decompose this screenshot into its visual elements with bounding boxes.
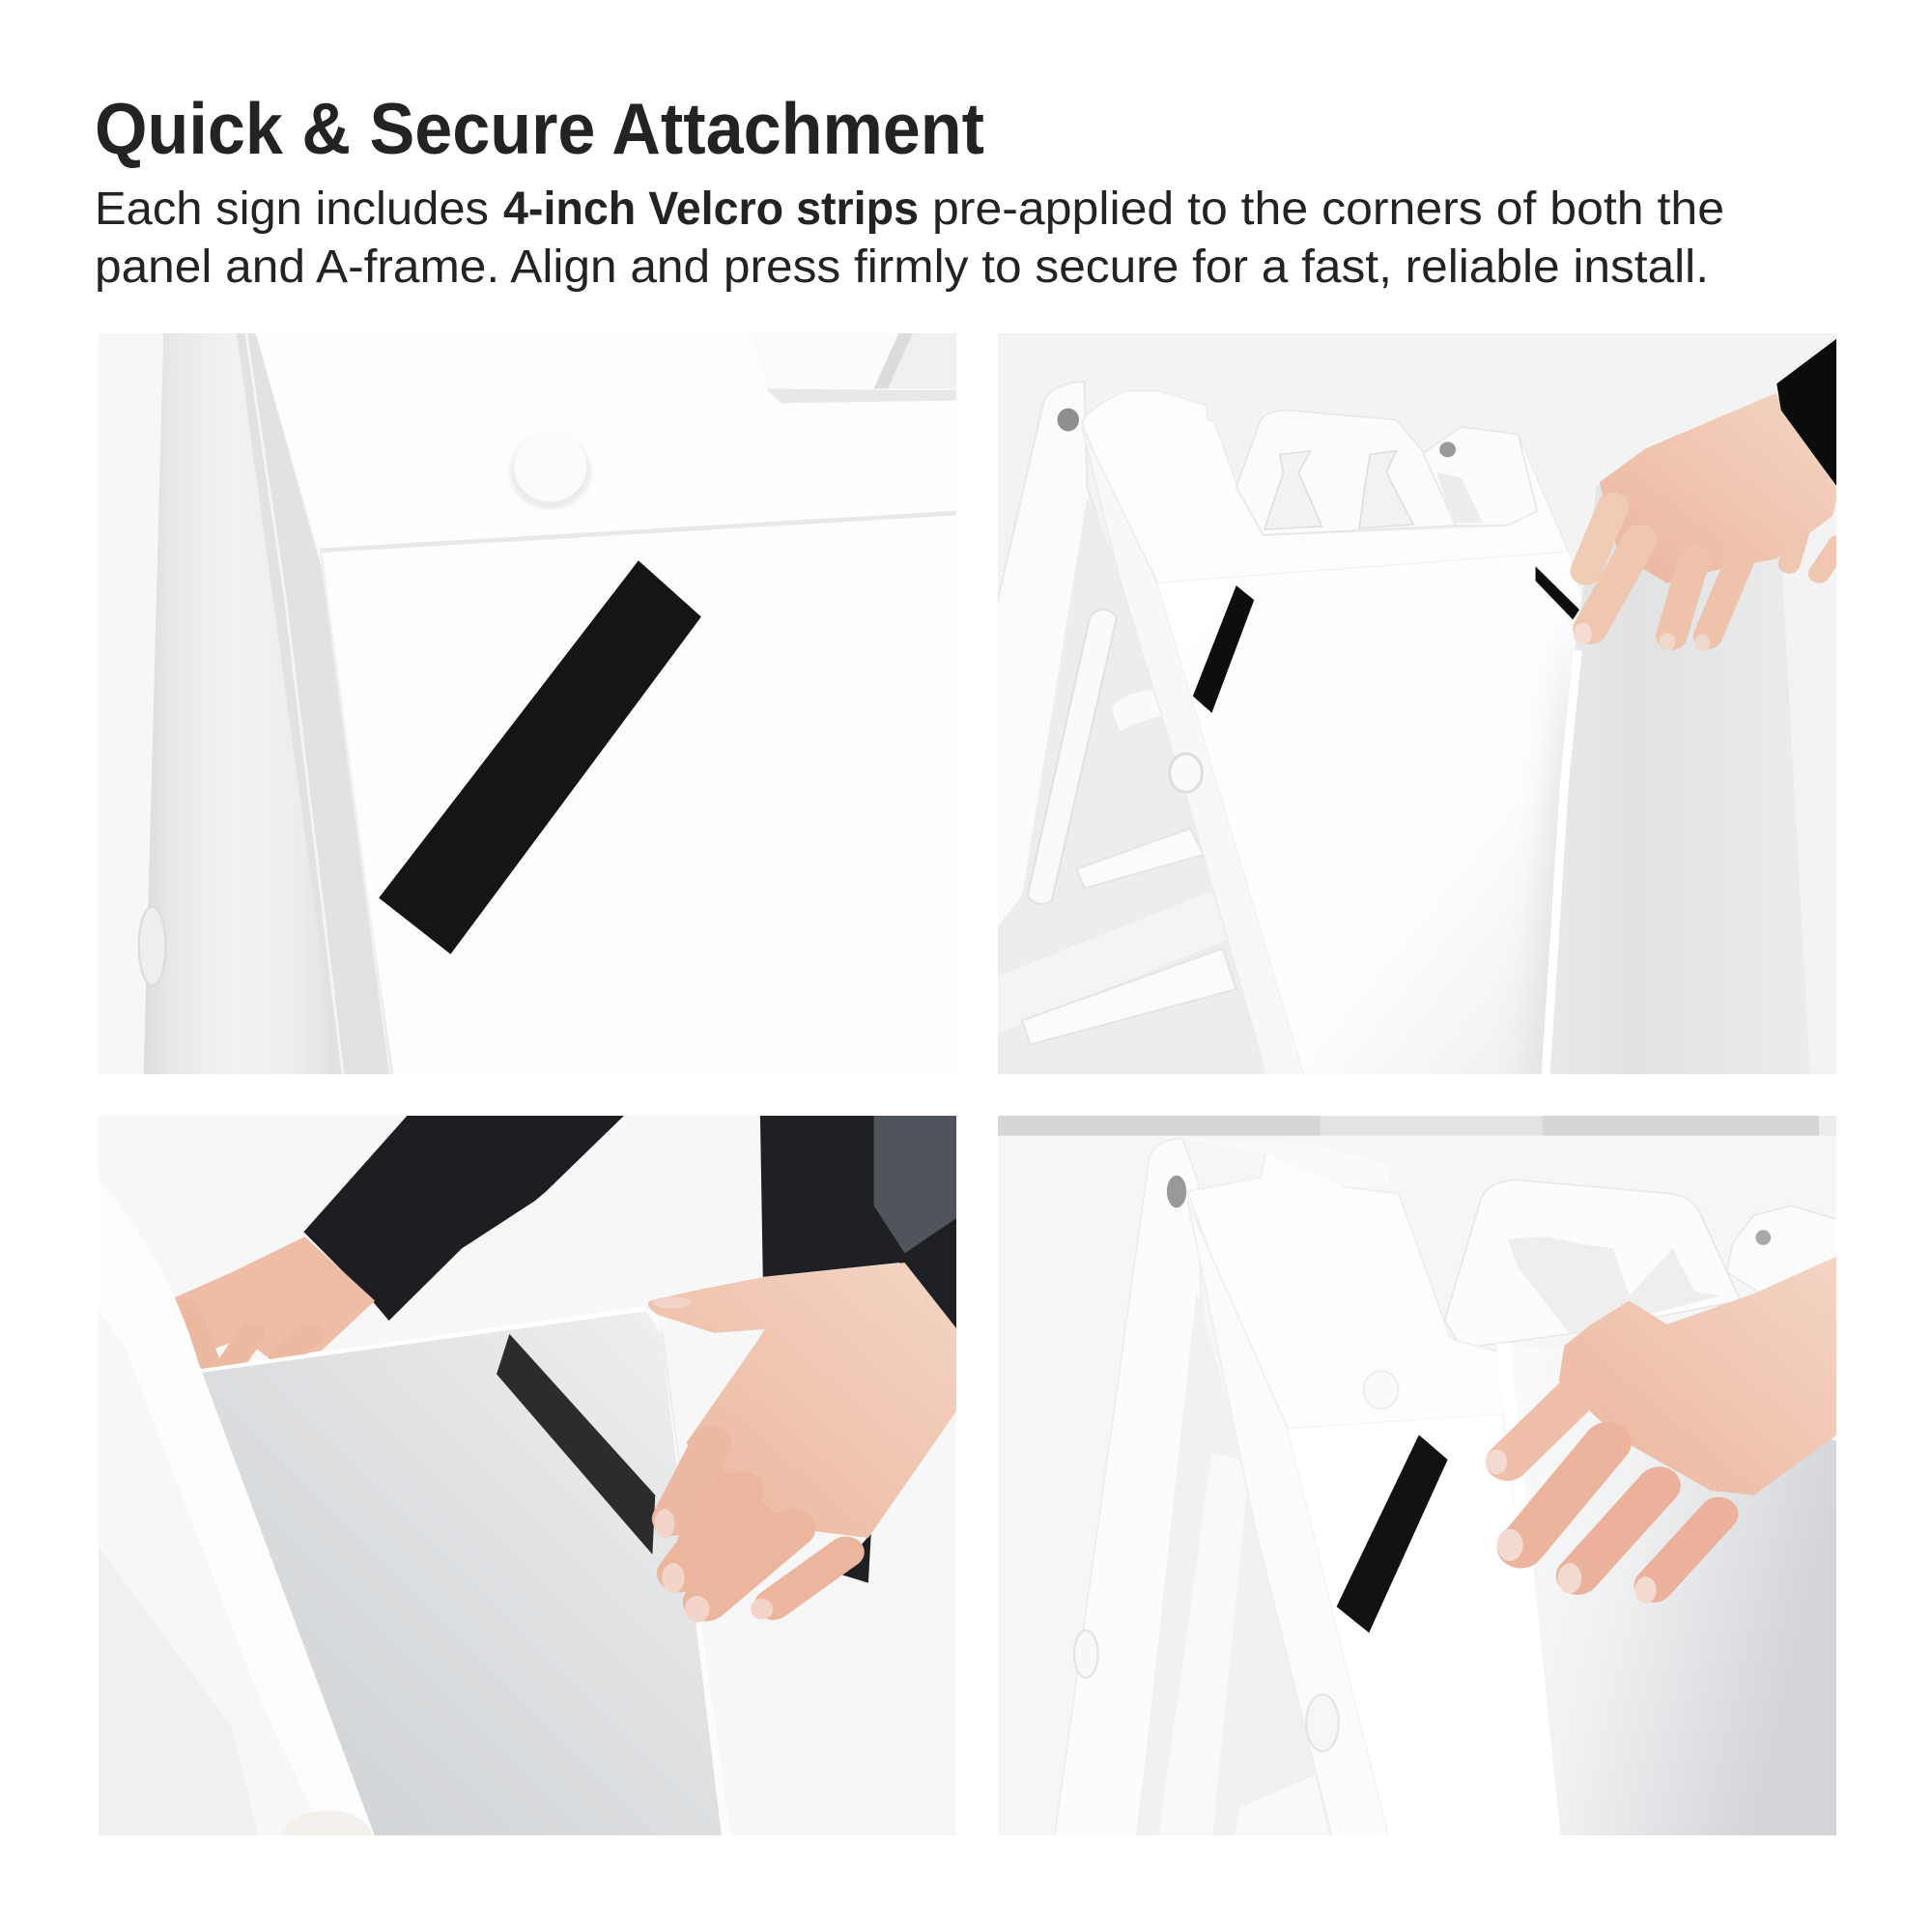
front rail	[1081, 427, 1275, 1074]
right hand	[648, 1263, 961, 1622]
description text: pre-applied to the corners of both the	[932, 184, 1724, 235]
description text	[95, 184, 1724, 293]
rivet	[510, 444, 591, 509]
front rail	[237, 332, 394, 1083]
top grey band	[998, 1116, 1836, 1136]
velcro strip	[379, 560, 701, 954]
white board	[1157, 552, 1586, 1083]
white board	[1288, 1414, 1559, 1844]
handle	[1236, 411, 1537, 535]
back frame leg	[998, 381, 1100, 603]
panel: two hands aligning panel	[92, 1111, 989, 1870]
back interior	[1150, 1293, 1200, 1723]
velcro strip	[497, 1334, 655, 1554]
front rail	[1187, 1201, 1391, 1844]
held panel	[1573, 485, 1808, 1074]
velcro strip	[1337, 1435, 1448, 1633]
left hand	[167, 1236, 375, 1362]
description text: 4-inch Velcro strips	[503, 184, 919, 235]
handle	[1445, 1179, 1838, 1349]
hand	[1486, 1256, 1838, 1604]
raised panel	[1496, 1344, 1840, 1844]
panel recess line	[321, 513, 958, 551]
panel: velcro strip close-up	[137, 333, 956, 1074]
top plate	[1187, 1153, 1505, 1429]
description text: Each sign includes	[95, 184, 489, 235]
right garment	[760, 1111, 961, 1583]
shadow of held panel	[1531, 672, 1571, 1072]
description text: panel and A-frame. Align and press firmly to secure for a fast, reliable install.	[95, 242, 1709, 293]
side rivet	[139, 906, 166, 985]
rivets	[1074, 1371, 1399, 1751]
velcro strips	[1193, 566, 1579, 713]
top right handle	[767, 333, 956, 403]
bolts	[1058, 409, 1456, 457]
main white plate	[371, 914, 393, 1072]
bolt	[1167, 1176, 1186, 1208]
left sleeve	[303, 1111, 629, 1321]
back frame interior with ribs	[995, 497, 1266, 1083]
panel: hand holding panel near A-frame	[995, 328, 1862, 1097]
rivet	[1170, 753, 1202, 792]
back leg of frame	[143, 332, 338, 1083]
hand	[1574, 393, 1838, 651]
panel board	[197, 1308, 728, 1844]
A-frame edge	[167, 1297, 375, 1835]
top plate	[1082, 391, 1569, 583]
title: Quick & Secure Attachment	[95, 88, 984, 169]
sleeve	[1776, 338, 1836, 486]
back frame leg	[1054, 1138, 1201, 1844]
panel: pressing panel onto A-frame	[995, 1111, 1862, 1870]
